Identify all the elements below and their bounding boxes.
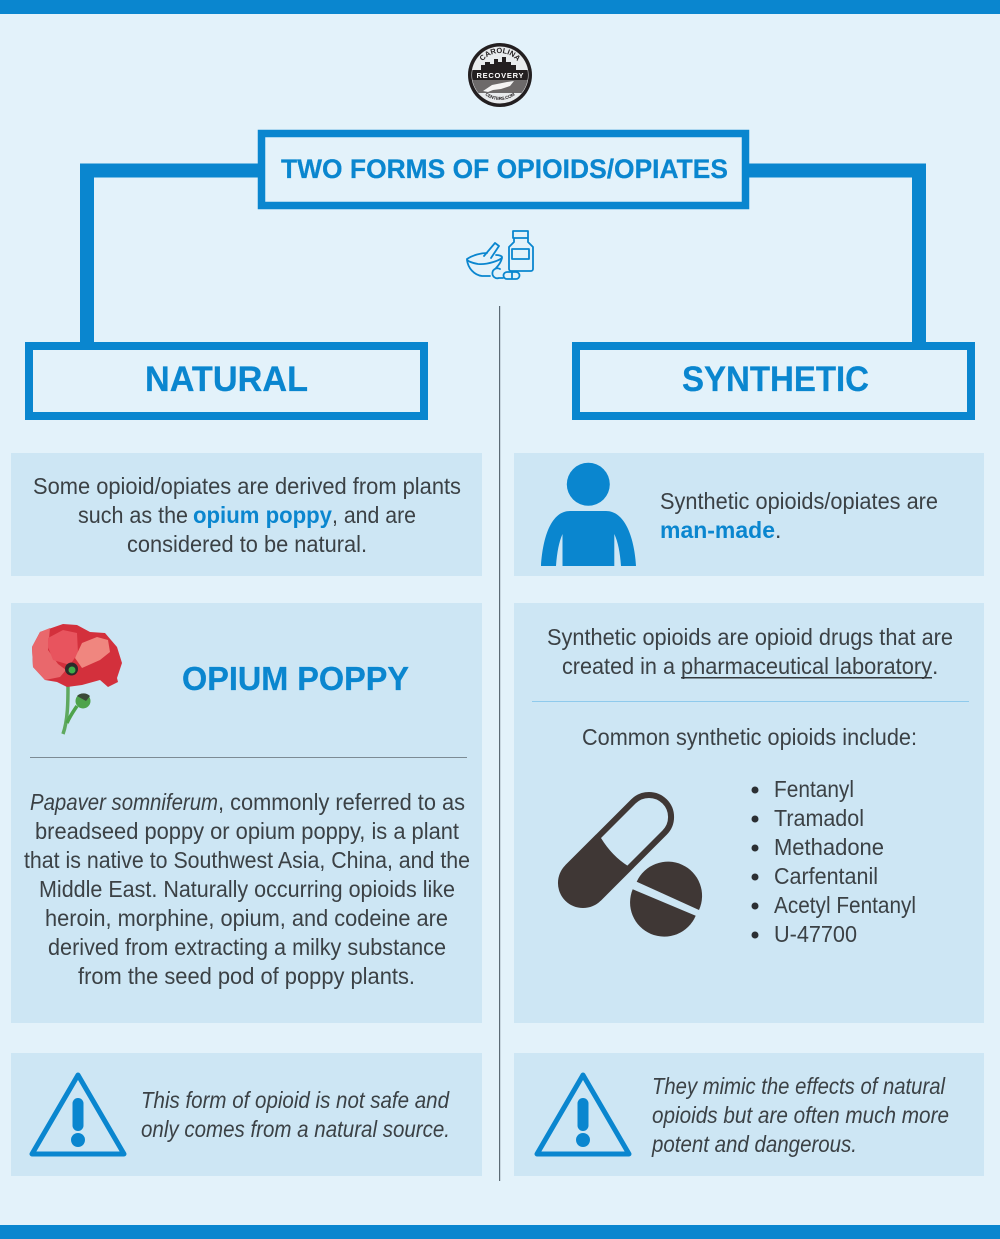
panel: opium poppy: heroin, morphine, opium, and codeine are — [45, 905, 448, 931]
heading box: synthetic: SYNTHETIC — [682, 360, 869, 399]
icon: poppy flower — [32, 624, 122, 734]
panel: synthetic details: . — [932, 653, 938, 679]
list: common synthetic opioids: U-47700 — [774, 921, 857, 947]
connector: title to natural — [87, 170, 258, 343]
panel: opium poppy: Papaver somniferum — [30, 789, 218, 815]
panel: synthetic details: pharmaceutical laboratory — [681, 653, 932, 679]
panel: natural intro: , and are — [332, 502, 416, 528]
list: common synthetic opioids: Methadone — [774, 834, 884, 860]
panel: natural intro: considered to be natural. — [127, 531, 367, 557]
heading box: synthetic — [576, 346, 971, 416]
list: common synthetic opioids — [752, 776, 916, 947]
panel: opium poppy: derived from extracting a milky substance — [48, 934, 446, 960]
list: common synthetic opioids: Acetyl Fentanyl — [774, 892, 916, 918]
logo: Carolina Recovery Centers — [468, 43, 532, 107]
panel: natural intro: Some opioid/opiates are derived from plants — [33, 473, 461, 499]
title: TWO FORMS OF OPIOIDS/OPIATES — [281, 154, 728, 184]
panel: natural warning: only comes from a natural source. — [141, 1116, 450, 1142]
panel: opium poppy: that is native to Southwest Asia, China, and the — [24, 847, 470, 873]
panel: natural warning: This form of opioid is not safe and — [141, 1087, 450, 1113]
panel: synthetic intro: Synthetic opioids/opiates are — [660, 488, 938, 514]
logo: Carolina Recovery Centers: RECOVERY — [476, 71, 524, 80]
panel: synthetic warning: opioids but are often much more — [652, 1102, 949, 1128]
panel: opium poppy: from the seed pod of poppy plants. — [78, 963, 415, 989]
panel: synthetic warning — [514, 1053, 984, 1176]
panel: opium poppy: OPIUM POPPY — [182, 660, 409, 697]
panel: synthetic intro — [514, 453, 984, 576]
icon: mortar and medicine bottle — [467, 231, 533, 279]
title — [262, 134, 746, 206]
panel: synthetic details: Synthetic opioids are opioid drugs that are — [547, 624, 953, 650]
panel: natural warning — [11, 1053, 482, 1176]
icon: warning triangle — [32, 1075, 124, 1154]
panel: opium poppy: , commonly referred to as — [218, 789, 465, 815]
connector: title to synthetic — [749, 170, 919, 343]
heading box: natural: NATURAL — [145, 360, 308, 399]
list: common synthetic opioids: Fentanyl — [774, 776, 854, 802]
icon: person — [541, 463, 636, 566]
panel: synthetic warning: potent and dangerous. — [651, 1131, 857, 1157]
panel: synthetic intro: man-made — [660, 517, 775, 543]
panel: synthetic intro: . — [775, 517, 781, 543]
list: common synthetic opioids: Carfentanil — [774, 863, 878, 889]
icon: warning triangle — [537, 1075, 629, 1154]
panel: opium poppy: Middle East. Naturally occurring opioids like — [39, 876, 455, 902]
panel: natural intro: such as the — [78, 502, 188, 528]
panel: synthetic details: created in a — [562, 653, 675, 679]
panel: synthetic details: Common synthetic opioids include: — [582, 724, 917, 750]
heading box: natural — [29, 346, 424, 416]
logo: Carolina Recovery Centers: CENTERS.COM — [486, 92, 515, 100]
icon: pills — [558, 795, 702, 937]
panel: opium poppy — [11, 603, 482, 1023]
panel: natural intro — [11, 453, 482, 576]
panel: natural intro: opium poppy — [193, 502, 332, 528]
list: common synthetic opioids: Tramadol — [774, 805, 864, 831]
panel: synthetic details — [514, 603, 984, 1023]
panel: synthetic warning: They mimic the effects of natural — [652, 1073, 946, 1099]
logo: Carolina Recovery Centers: CAROLINA — [480, 48, 520, 62]
panel: opium poppy: breadseed poppy or opium poppy, is a plant — [35, 818, 460, 844]
